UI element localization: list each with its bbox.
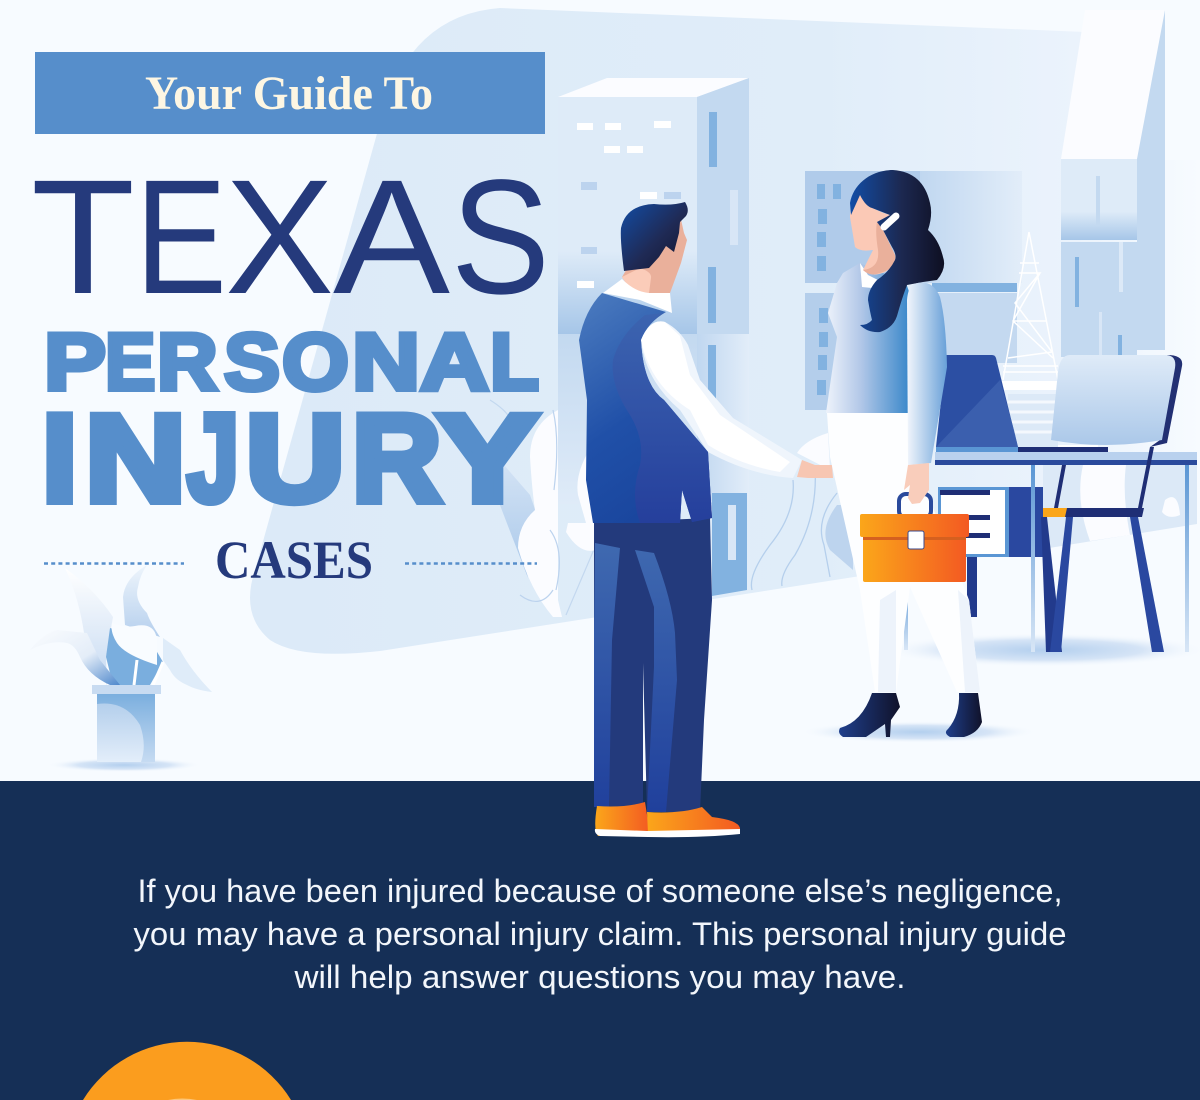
woman: earpiece — [884, 216, 896, 227]
illustration: radio tower — [1003, 232, 1058, 380]
title: INJURY: I — [42, 390, 77, 528]
man: vest shading — [613, 313, 712, 523]
illustration: potted plant — [30, 565, 212, 772]
illustration: light monitor — [1051, 355, 1182, 447]
man: hair — [621, 202, 688, 271]
illustration: woman shadow — [801, 721, 1037, 743]
title: PERSONAL: E — [105, 318, 155, 408]
man: right shoe — [647, 807, 740, 834]
illustration: middle building — [805, 171, 1022, 410]
man: white shirt collar — [603, 279, 672, 313]
title: PERSONAL — [44, 318, 539, 408]
illustration: backdrop under desk — [1043, 465, 1197, 549]
plant: right leaf — [163, 638, 212, 692]
woman: neck and face — [850, 195, 895, 275]
man: hand — [797, 460, 833, 478]
navy footer panel — [0, 781, 1200, 1100]
man: shoe soles — [595, 829, 740, 837]
man: vest — [579, 293, 712, 523]
illustration: building base block — [712, 493, 747, 596]
title: PERSONAL: R — [157, 318, 218, 408]
title: INJURY: Y — [437, 390, 538, 528]
woman: neck shadow — [863, 222, 895, 274]
woman: hair — [850, 170, 944, 332]
title: TEXAS — [31, 145, 550, 328]
heading banner — [35, 52, 545, 134]
illustration: background plant right of man — [751, 433, 853, 590]
plant: back leaf — [65, 568, 113, 685]
title: INJURY — [42, 390, 538, 528]
illustration: woman — [826, 170, 982, 737]
illustration: low shelving behind desk — [1000, 381, 1062, 452]
title: TEXAS: T — [31, 145, 135, 328]
plant: pot highlight — [97, 703, 144, 762]
title: INJURY: J — [187, 390, 239, 528]
woman: trouser shading — [878, 590, 980, 692]
illustration: tall building — [558, 78, 749, 504]
illustration: right building — [1061, 10, 1165, 357]
subtitle: cases with dotted rules: CASES — [215, 530, 373, 590]
woman: arm sleeve — [907, 283, 947, 465]
plant: pot — [97, 693, 155, 762]
title: INJURY: U — [246, 390, 345, 528]
intro paragraph: you may have a personal injury claim. This personal injury guide — [134, 916, 1066, 952]
plant: white front leaf — [112, 623, 157, 665]
illustration: background plant left of man — [490, 400, 598, 617]
title: TEXAS: S — [451, 145, 550, 328]
illustration: chair — [1041, 447, 1164, 652]
man: trousers — [594, 518, 712, 812]
title: PERSONAL: N — [352, 318, 420, 408]
title: PERSONAL: O — [282, 318, 349, 408]
man: neck and face — [622, 215, 687, 293]
plant: tall leaf — [123, 565, 160, 637]
intro paragraph: If you have been injured because of someone else’s negligence, — [138, 873, 1062, 909]
title: TEXAS: E — [135, 145, 227, 328]
orange circle — [83, 1042, 291, 1100]
heading: your guide to: Your Guide To — [145, 67, 433, 120]
woman: white trousers — [827, 413, 980, 692]
woman: briefcase handle — [899, 494, 931, 518]
intro paragraph — [134, 873, 1066, 995]
man: left shoe — [595, 802, 650, 836]
woman: left boot — [839, 693, 900, 737]
illustration: desk — [904, 452, 1197, 652]
title: PERSONAL: L — [490, 318, 539, 408]
woman: top — [826, 263, 912, 413]
intro paragraph: will help answer questions you may have. — [293, 959, 906, 995]
title: TEXAS: X — [225, 145, 334, 328]
woman: briefcase — [860, 514, 969, 582]
illustration: man — [579, 202, 833, 837]
title: PERSONAL: S — [224, 318, 280, 408]
woman: white collar — [860, 263, 878, 288]
title: INJURY: N — [85, 390, 186, 528]
man: shirt arm highlight — [641, 321, 790, 472]
plant: left leaf — [30, 630, 120, 685]
plant: stem highlights — [134, 660, 163, 685]
title: TEXAS: A — [333, 145, 450, 328]
title: PERSONAL: A — [420, 318, 489, 408]
plant: pot rim — [92, 685, 161, 694]
man: neck highlight — [622, 268, 651, 293]
plant: blue inner leaf — [106, 628, 163, 685]
title: PERSONAL: P — [44, 318, 106, 408]
woman: right boot — [946, 693, 982, 737]
woman: hand — [904, 463, 929, 504]
title: INJURY: R — [352, 390, 442, 528]
plant: shadow — [47, 758, 201, 772]
man: white shirt arm — [641, 321, 802, 478]
illustration: desk shadow — [883, 633, 1200, 667]
man: trouser highlights — [594, 543, 677, 812]
illustration: dark laptop — [936, 355, 1108, 452]
illustration: office backdrop wall — [250, 8, 1200, 654]
